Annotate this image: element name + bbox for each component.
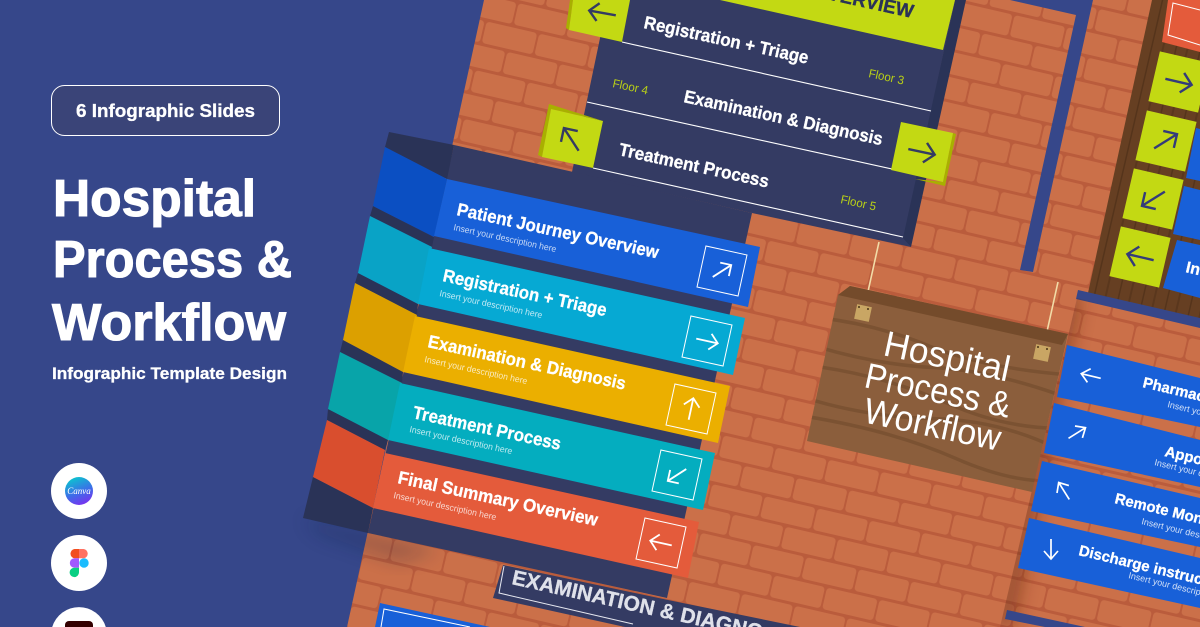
wooden directory board, top right xyxy=(1088,0,1200,320)
sign plate left xyxy=(854,304,872,322)
directory side edge xyxy=(902,0,966,247)
title: Process & xyxy=(53,231,292,289)
arrow tile: left xyxy=(566,0,630,42)
directory board xyxy=(572,0,955,247)
divider rules xyxy=(587,42,931,237)
sign title: Process & xyxy=(861,355,1015,426)
arrow tile: up left xyxy=(538,104,603,168)
list row: Appointment xyxy=(1044,403,1200,487)
step 2: Registration + Triage xyxy=(418,248,745,375)
folded colour tabs xyxy=(313,147,447,508)
floor 3: Floor 3 xyxy=(867,66,906,88)
badge: 6 infographic slides: 6 Infographic Slides xyxy=(76,101,255,121)
green arrow tile: up right xyxy=(1135,110,1197,172)
blue strip at bottom right xyxy=(1005,610,1085,627)
step 1: Patient Journey Overview: Patient Journey Overview xyxy=(455,199,662,263)
step 1: Patient Journey Overview: Insert your description here xyxy=(453,222,557,254)
navy backing xyxy=(368,145,752,598)
blue frame strip behind upper wall xyxy=(1010,0,1093,272)
sign board xyxy=(807,286,1068,492)
sign strings xyxy=(865,242,1058,345)
title: Workflow xyxy=(52,294,287,352)
green arrow tile: left xyxy=(1109,226,1171,288)
blue strip under wooden board xyxy=(1076,290,1200,328)
title xyxy=(52,170,292,352)
subtitle: Infographic Template Design xyxy=(52,364,287,383)
row: Treatment Process: Treatment Process xyxy=(617,139,771,192)
row: Examination & Diagnosis: Examination & Diagnosis xyxy=(682,86,885,149)
drop shadow under step panel xyxy=(303,518,440,562)
green arrow tile: down left xyxy=(1122,168,1184,230)
icon: figma xyxy=(51,535,107,591)
step 5: Final Summary Overview xyxy=(373,453,699,578)
blue directory panels xyxy=(1163,128,1200,298)
folded edge strips xyxy=(303,132,454,533)
step 4: Treatment Process xyxy=(388,383,715,510)
step 5: Final Summary Overview: Final Summary Overview xyxy=(396,467,601,530)
icon: canva: Canva xyxy=(67,486,91,496)
floor 4: Floor 4 xyxy=(611,76,650,98)
icon: adobe app xyxy=(52,607,106,627)
title: Hospital xyxy=(53,170,256,228)
bottom blue slide peek xyxy=(375,603,490,627)
step 3: Examination & Diagnosis xyxy=(403,316,730,443)
step panel: patient journey xyxy=(303,132,760,598)
icon: canva xyxy=(51,463,107,519)
hanging wooden sign xyxy=(807,242,1068,492)
arrow tile: right xyxy=(891,122,956,186)
step 2: Registration + Triage: Insert your description here xyxy=(439,288,543,320)
sign title xyxy=(860,323,1015,459)
step 1: Patient Journey Overview xyxy=(434,179,760,307)
floor 5: Floor 5 xyxy=(839,192,878,214)
shadow cast by front wall xyxy=(995,290,1080,627)
top directory sign xyxy=(538,0,966,247)
row: Registration + Triage: Registration + Triage xyxy=(642,12,811,68)
sign title: Workflow xyxy=(860,390,1006,459)
brick wall xyxy=(347,0,1200,627)
directory header xyxy=(720,0,955,50)
right panel list xyxy=(1018,345,1200,608)
badge: 6 infographic slides xyxy=(52,86,280,136)
step 3: Examination & Diagnosis: Insert your description here xyxy=(424,354,528,386)
sign plate right xyxy=(1033,344,1051,362)
step 5: Final Summary Overview: Insert your description here xyxy=(393,490,497,522)
sign title: Hospital xyxy=(880,323,1014,389)
list row: Pharmacy xyxy=(1057,345,1200,427)
list row: Remote Monitoring xyxy=(1031,461,1200,547)
list row: Discharge instructions xyxy=(1018,518,1200,608)
step 2: Registration + Triage: Registration + Triage xyxy=(441,265,609,320)
step 4: Treatment Process: Insert your description here xyxy=(409,424,513,456)
red directory panel xyxy=(1162,0,1200,52)
step 3: Examination & Diagnosis: Examination & Diagnosis xyxy=(426,331,628,394)
step 4: Treatment Process: Treatment Process xyxy=(411,402,563,454)
green arrow tile: right xyxy=(1148,51,1200,113)
